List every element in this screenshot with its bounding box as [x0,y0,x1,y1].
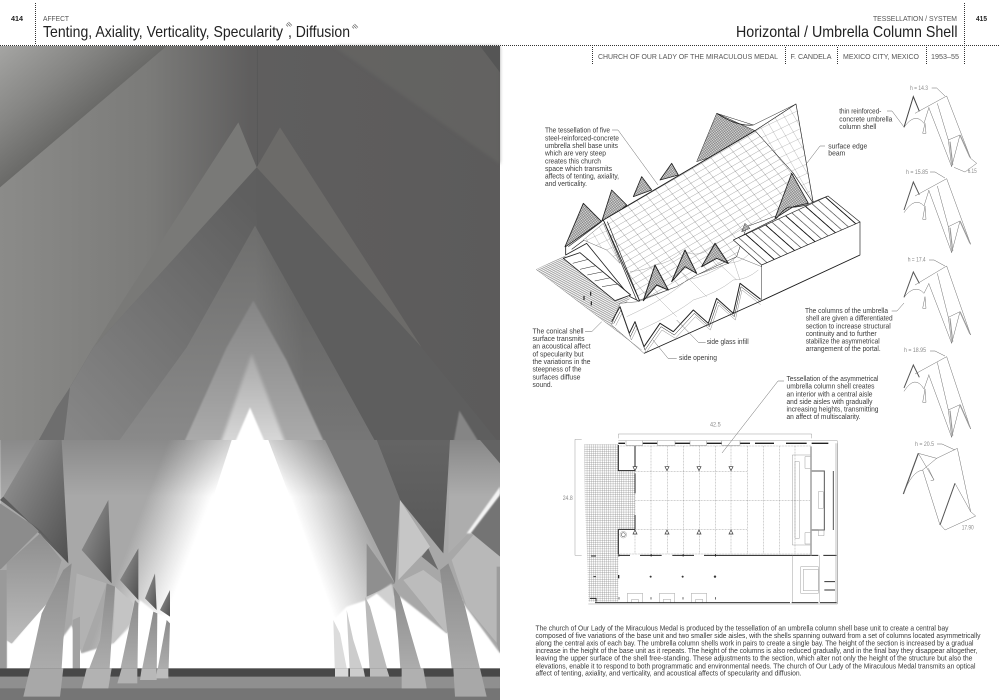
unit h = 17.4 [904,266,971,343]
label: thin shell: column shell [839,124,877,131]
note: tessellation of five shells: which are very steep [544,151,606,158]
note: columns [805,308,893,353]
unit h = 15.85 [904,179,971,253]
unit h = 20.5 [903,448,976,530]
label: thin shell [839,108,892,131]
note: tessellation of five shells [544,128,619,188]
note: conical shell surface: sound. [532,382,553,389]
plan dimension: 42.5: 42.5 [710,423,721,429]
note: tessellation of asymmetrical shell: Tessellation of the asymmetrical [786,376,879,383]
section dimension labels: h = 20.5 [915,442,935,448]
front zigzag dark peaks [643,265,668,301]
label: side opening: side opening [679,355,717,362]
lower aisle [792,555,819,603]
corrugated side roof [733,196,860,265]
note: tessellation of asymmetrical shell: umbrella column shell creates [786,384,875,391]
back peaks [565,203,602,247]
rear gable [697,113,755,162]
unit h = 14.3 [904,96,977,172]
note: columns: shell are given a differentiated [806,316,893,323]
section units [904,96,977,437]
note: tessellation of five shells: The tessellation of five [545,128,610,135]
body paragraph: composed of five variations of the base unit and two smaller side aisles, with the shells spanning outward from a set of columns located asymmetrically [536,633,981,640]
label: thin shell: concrete umbrella [839,116,892,123]
note: conical shell surface: steepness of the [532,367,582,374]
project info strip: F. CANDELA [790,54,832,61]
body paragraph: along the central axis of each bay. The umbrella column shells work in pairs to create a single bay. The height of the section is increased by a gradual [536,641,974,648]
note: conical shell surface: of specularity but [532,351,584,358]
outer walls [588,441,837,604]
note: tessellation of asymmetrical shell: increasing heights, transmitting [786,407,879,414]
left gable [566,220,640,302]
note: conical shell surface: The conical shell [532,328,584,335]
base line [644,255,860,353]
section dimension labels [904,86,977,531]
note: tessellation of asymmetrical shell: an interior with a central aisle [786,391,873,398]
note: tessellation of five shells: space which transmits [545,166,612,173]
label: surface edge beam: surface edge [828,143,867,150]
front zigzag wall [612,283,761,347]
right heading: Horizontal / Umbrella Column Shell [736,24,958,41]
altar area [792,455,811,545]
leader lines [585,88,955,453]
note: tessellation of five shells: steel-reinforced-concrete [545,135,619,142]
page number left: 414 [11,16,23,23]
entry plaza grid [584,444,635,602]
dimension lines [575,434,812,555]
note: columns: stabilize the asymmetrical [806,339,880,346]
left heading: , Diffusion [288,24,350,41]
note: columns: section to increase structural [806,323,891,330]
page number right: 415 [976,16,987,23]
note: tessellation of five shells: affects of tenting, axiality, [545,173,619,180]
lower columns, vaults and floor [0,427,500,700]
left heading: Tenting, Axiality, Verticality, Specularity [43,24,283,41]
project info strip: MEXICO CITY, MEXICO [843,54,920,61]
lower side aisle roof [612,257,762,353]
note: tessellation of asymmetrical shell: and side aisles with gradually [786,399,873,406]
note: tessellation of asymmetrical shell [786,376,879,421]
system label: TESSELLATION / SYSTEM [873,16,957,23]
section dimension labels: 17.90 [962,525,974,531]
body paragraph: increase in the height of the base unit as it repeats. The height of the columns is also reduced gradually, and in the final bay they disappear altogether, [536,648,978,655]
header rules [0,3,1000,65]
entrance steps [563,253,631,301]
note: columns: The columns of the umbrella [805,308,888,315]
body paragraph: The church of Our Lady of the Miraculous Medal is produced by the tessellation of an umbrella column shell base unit to create a central bay [536,625,949,632]
human figures [584,292,591,305]
note: conical shell surface: the variations in the [532,359,591,366]
plan dimension: 24.8: 24.8 [563,496,573,502]
note: conical shell surface: an acoustical affect [532,344,591,351]
body paragraph [536,625,981,678]
upper vault surfaces [0,46,500,464]
columns triangles [633,467,733,534]
body paragraph: leaving the upper surface of the shell free-standing. These adjustments to the section, which alter not only the height of the structure but also the [536,656,973,663]
label: surface edge beam: beam [828,151,845,158]
section dimension labels: 6.15 [968,169,977,175]
note: tessellation of five shells: and verticality. [545,181,587,188]
note: tessellation of asymmetrical shell: an affect of multiscalarity. [786,414,861,421]
ground plane hatch [536,256,642,350]
project info strip: 1953–55 [931,54,959,61]
axonometric drawing of the church [536,104,860,353]
note: conical shell surface: surfaces diffuse [532,374,581,381]
affect label: AFFECT [43,16,70,23]
section dimension labels: h = 18.95 [904,348,927,354]
note: conical shell surface [532,328,591,389]
right gable opening [775,173,808,218]
photo: church interior with umbrella shells [0,46,500,700]
floor plan [575,434,837,604]
nave side wall [618,554,837,557]
project info strip: CHURCH OF OUR LADY OF THE MIRACULOUS MEDAL [598,54,778,61]
note: tessellation of five shells: creates this church [545,158,601,165]
project info strip [598,54,959,61]
note: tessellation of five shells: umbrella shell base units [545,143,618,150]
note: columns: arrangement of the portal. [806,346,881,353]
label: surface edge beam [828,143,867,158]
unit h = 18.95 [904,357,971,437]
note: conical shell surface: surface transmits [532,336,585,343]
note: columns: continuity and to further [806,331,877,338]
body paragraph: elevations, enable it to respond to both programmatic and environmental needs. The church of Our Lady of the Miraculous Medal transmits an optical [536,663,976,670]
body paragraph: affect of tenting, axiality, and verticality, and acoustical affects of specularity and diffusion. [536,671,802,678]
section dimension labels: h = 14.3 [910,86,929,92]
section dimension labels: h = 15.85 [906,170,929,176]
section dimension labels: h = 17.4 [908,258,926,264]
structural grid [618,446,811,554]
label: side glass infill: side glass infill [707,339,749,346]
label: thin shell: thin reinforced- [839,108,882,115]
main roof mesh [603,131,793,301]
